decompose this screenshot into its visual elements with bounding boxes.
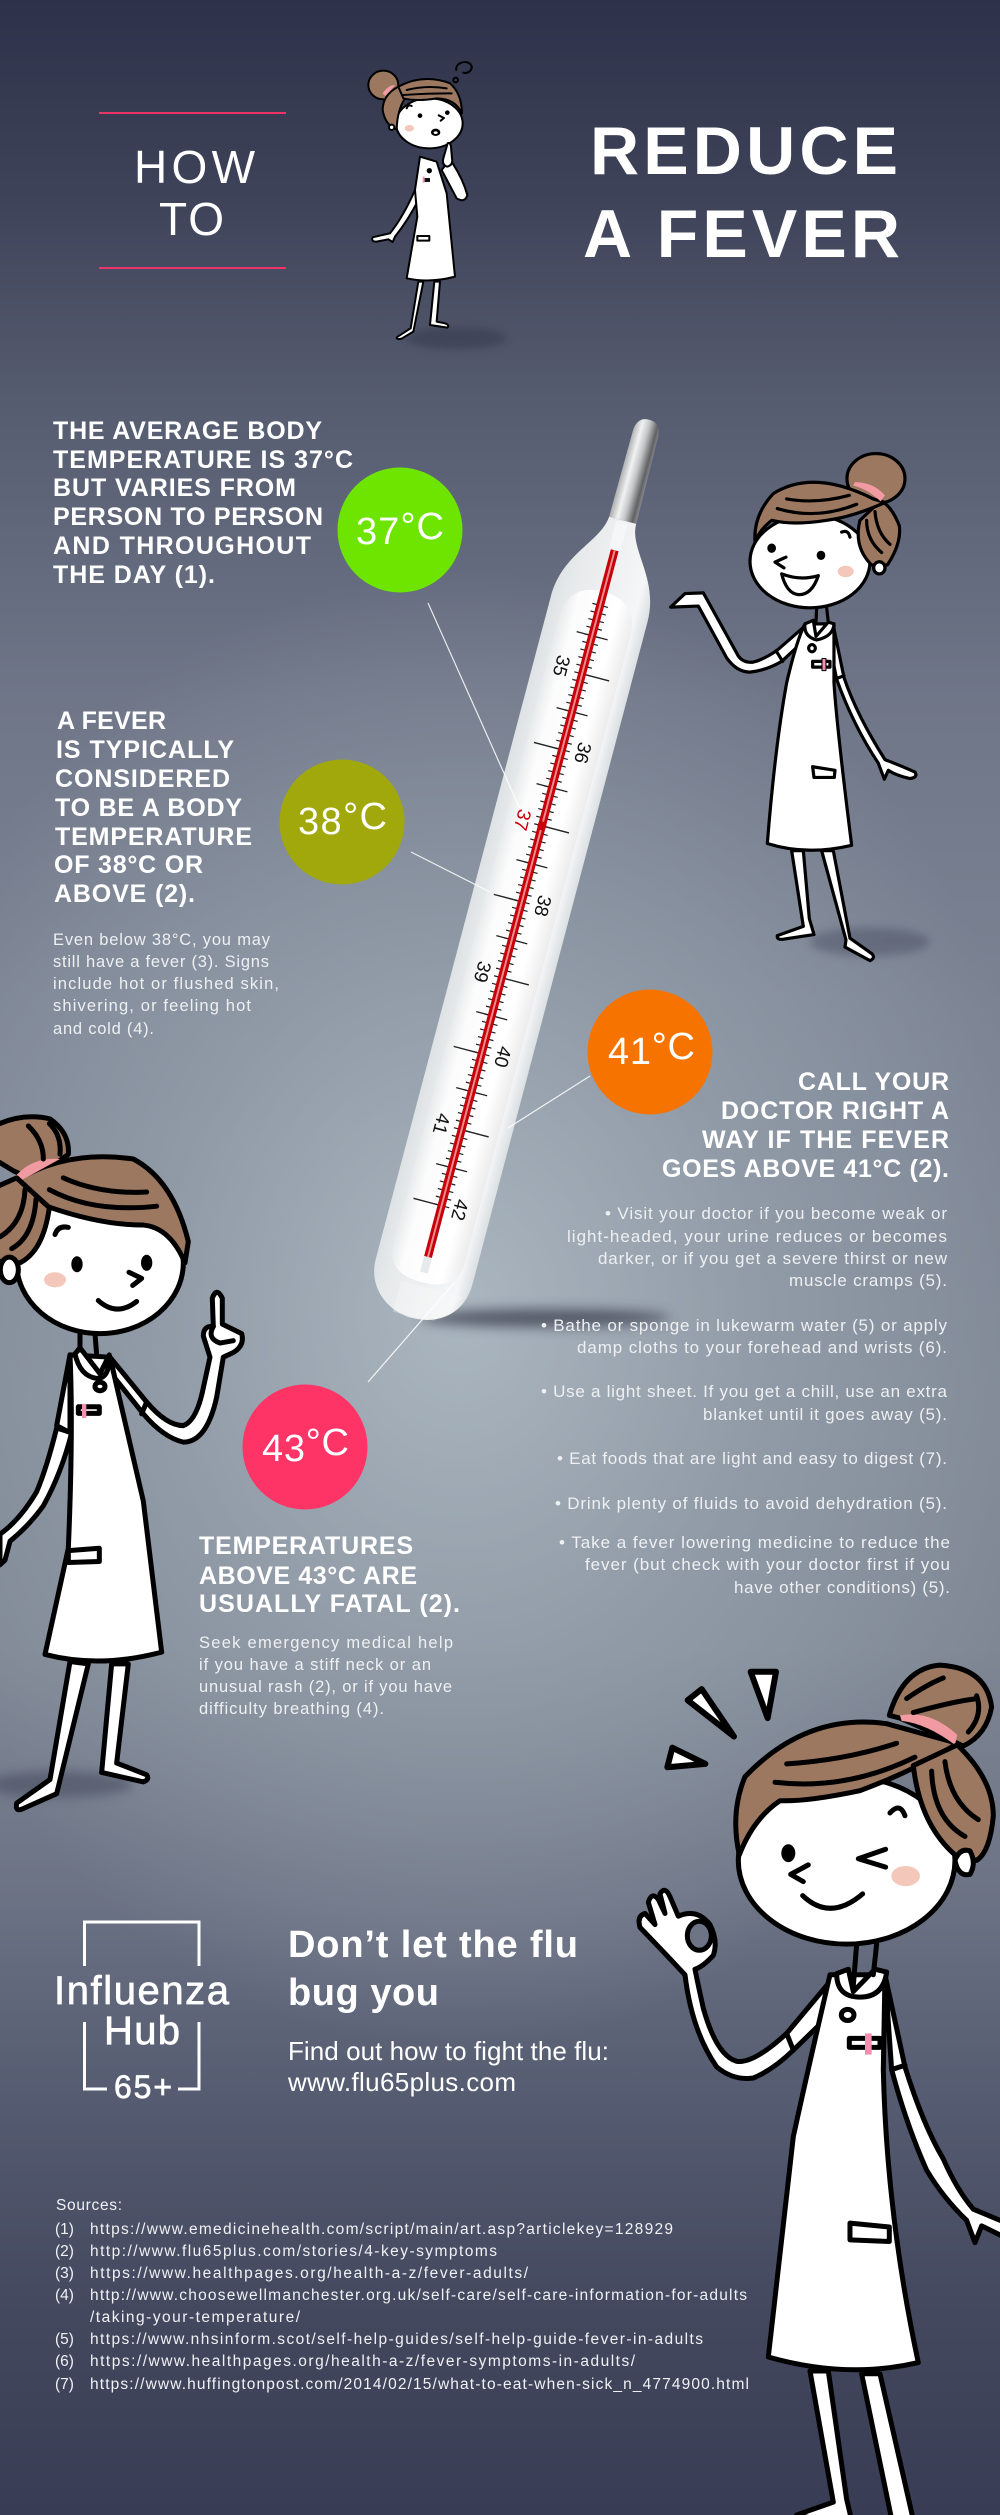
text block: average body temperature: THE DAY (1). [53, 561, 215, 589]
sources list: Sources: [56, 2197, 122, 2214]
badge: 41 degrees: 41 [608, 1031, 651, 1073]
sources list: /taking-your-temperature/ [90, 2309, 301, 2326]
text block: call your doctor: • Bathe or sponge in lukewarm water (5) or apply [541, 1316, 948, 1335]
logo: influenza hub 65+: 65+ [114, 2069, 172, 2105]
badge: 43 degrees: °C [306, 1422, 349, 1464]
thermometer: 42 [446, 1197, 472, 1223]
title: reduce a fever [583, 113, 900, 272]
text block: call your doctor: blanket until it goes away (5). [703, 1405, 947, 1424]
call to action: bug you [288, 1972, 439, 2014]
thermometer: 39 [469, 959, 494, 985]
text block: call your doctor: muscle cramps (5). [789, 1271, 947, 1290]
sources list: https://www.huffingtonpost.com/2014/02/15/what-to-eat-when-sick_n_4774900.html [90, 2376, 749, 2393]
sources list: http://www.flu65plus.com/stories/4-key-symptoms [90, 2243, 497, 2260]
sources list: (3) [55, 2265, 74, 2282]
text block: fatal temperatures: Seek emergency medical help [199, 1634, 453, 1652]
thermometer [364, 407, 698, 1331]
badge: 37 degrees: 37 [356, 511, 399, 553]
sources list: (6) [55, 2353, 74, 2370]
icon: ok gesture nurse [639, 1665, 1000, 2515]
icon: pointing nurse [0, 1117, 242, 1810]
text block: fever definition: and cold (4). [53, 1020, 154, 1038]
sources list: (1) [55, 2221, 74, 2238]
thermometer: 35 [548, 653, 573, 679]
text block: average body temperature: PERSON TO PERSON [53, 503, 323, 531]
sources list [55, 2197, 749, 2393]
logo: influenza hub 65+: Hub [104, 2009, 180, 2053]
title: reduce a fever: REDUCE [590, 113, 898, 189]
text block: fatal temperatures: unusual rash (2), or if you have [199, 1678, 452, 1696]
title: how to [99, 112, 286, 269]
badge: 38 degrees: °C [343, 796, 387, 838]
text block: fever definition: TO BE A BODY [55, 794, 242, 822]
call to action [287, 1924, 609, 2097]
call to action: Find out how to fight the flu: [288, 2036, 609, 2066]
text block: fever definition: IS TYPICALLY [56, 736, 234, 764]
text block: fever definition: A FEVER [57, 707, 166, 735]
thermometer: 38 [529, 893, 555, 919]
text block: fatal temperatures: if you have a stiff neck or an [199, 1656, 431, 1674]
text block: fever definition: TEMPERATURE [55, 823, 252, 851]
text block: average body temperature: THE AVERAGE BODY [53, 417, 322, 445]
badge: 38 degrees [280, 760, 404, 884]
text block: fatal temperatures [199, 1532, 460, 1718]
title: how to: HOW [134, 141, 256, 193]
text block: average body temperature: BUT VARIES FROM [53, 474, 296, 502]
badge: 43 degrees [242, 1384, 368, 1510]
thermometer: 36 [569, 740, 595, 766]
text block: fever definition [53, 707, 279, 1038]
sources list: https://www.nhsinform.scot/self-help-guides/self-help-guide-fever-in-adults [90, 2331, 703, 2348]
text block: fever definition: still have a fever (3). Signs [53, 953, 269, 971]
title: how to: TO [159, 193, 224, 245]
icon: presenting nurse [671, 454, 930, 961]
thermometer: 40 [489, 1044, 515, 1070]
badge: 41 degrees: °C [652, 1026, 695, 1068]
text block: call your doctor: fever (but check with your doctor first if you [585, 1555, 950, 1574]
text block: call your doctor: GOES ABOVE 41°C (2). [662, 1155, 949, 1183]
text block: call your doctor: WAY IF THE FEVER [702, 1126, 949, 1154]
text block: fatal temperatures: TEMPERATURES [199, 1532, 413, 1560]
text block: fever definition: CONSIDERED [55, 765, 230, 793]
sources list: (4) [55, 2287, 74, 2304]
logo: influenza hub 65+: Influenza [54, 1969, 230, 2013]
text block: call your doctor: DOCTOR RIGHT A [721, 1097, 949, 1125]
sources list: https://www.healthpages.org/health-a-z/fever-symptoms-in-adults/ [90, 2353, 636, 2370]
sources list: https://www.emedicinehealth.com/script/main/art.asp?articlekey=128929 [90, 2221, 673, 2238]
leader line: 37 [428, 603, 520, 809]
text block: call your doctor: • Drink plenty of fluids to avoid dehydration (5). [555, 1494, 947, 1513]
badge: 37 degrees: °C [400, 506, 444, 548]
thermometer: 37 [509, 807, 534, 833]
sources list: (7) [55, 2376, 74, 2393]
sources list: http://www.choosewellmanchester.org.uk/self-care/self-care-information-for-adults [90, 2287, 747, 2304]
thermometer: 41 [428, 1111, 453, 1137]
sources list: (5) [55, 2331, 74, 2348]
leader line: 38 [411, 852, 490, 892]
text block: call your doctor: light-headed, your urine reduces or becomes [567, 1227, 947, 1246]
text block: average body temperature: AND THROUGHOUT [53, 532, 311, 560]
leader line: 41 [508, 1076, 590, 1128]
text block: fever definition: include hot or flushed skin, [53, 975, 279, 993]
text block: call your doctor: • Eat foods that are light and easy to digest (7). [557, 1449, 947, 1468]
text block: call your doctor: damp cloths to your forehead and wrists (6). [577, 1338, 947, 1357]
text block: fatal temperatures: USUALLY FATAL (2). [199, 1590, 460, 1618]
sources list: https://www.healthpages.org/health-a-z/fever-adults/ [90, 2265, 529, 2282]
icon: thinking nurse [368, 62, 507, 349]
badge: 41 degrees [588, 990, 712, 1114]
text block: call your doctor: • Take a fever lowering medicine to reduce the [559, 1533, 950, 1552]
sources list: (2) [55, 2243, 74, 2260]
text block: fever definition: shivering, or feeling hot [53, 997, 251, 1015]
text block: call your doctor: darker, or if you get a severe thirst or new [598, 1249, 948, 1268]
text block: call your doctor: CALL YOUR [798, 1068, 949, 1096]
text block: call your doctor: have other conditions) (5). [734, 1578, 950, 1597]
text block: call your doctor: • Visit your doctor if you become weak or [605, 1204, 947, 1223]
badge: 37 degrees [338, 468, 462, 592]
call to action: www.flu65plus.com [287, 2067, 516, 2097]
text block: average body temperature [53, 417, 353, 589]
text block: call your doctor [541, 1068, 950, 1597]
badge: 43 degrees: 43 [262, 1428, 305, 1470]
text block: fever definition: Even below 38°C, you may [53, 931, 271, 949]
text block: call your doctor: • Use a light sheet. If you get a chill, use an extra [541, 1382, 948, 1401]
badge: 38 degrees: 38 [298, 801, 342, 843]
leader line: 43 [368, 1282, 455, 1382]
logo: influenza hub 65+ [54, 1922, 230, 2105]
call to action: Don’t let the flu [288, 1924, 578, 1966]
text block: fever definition: ABOVE (2). [54, 880, 195, 908]
text block: fever definition: OF 38°C OR [54, 851, 203, 879]
text block: average body temperature: TEMPERATURE IS 37°C [53, 446, 353, 474]
title: reduce a fever: A FEVER [583, 196, 900, 272]
text block: fatal temperatures: difficulty breathing (4). [199, 1700, 384, 1718]
text block: fatal temperatures: ABOVE 43°C ARE [199, 1562, 417, 1590]
